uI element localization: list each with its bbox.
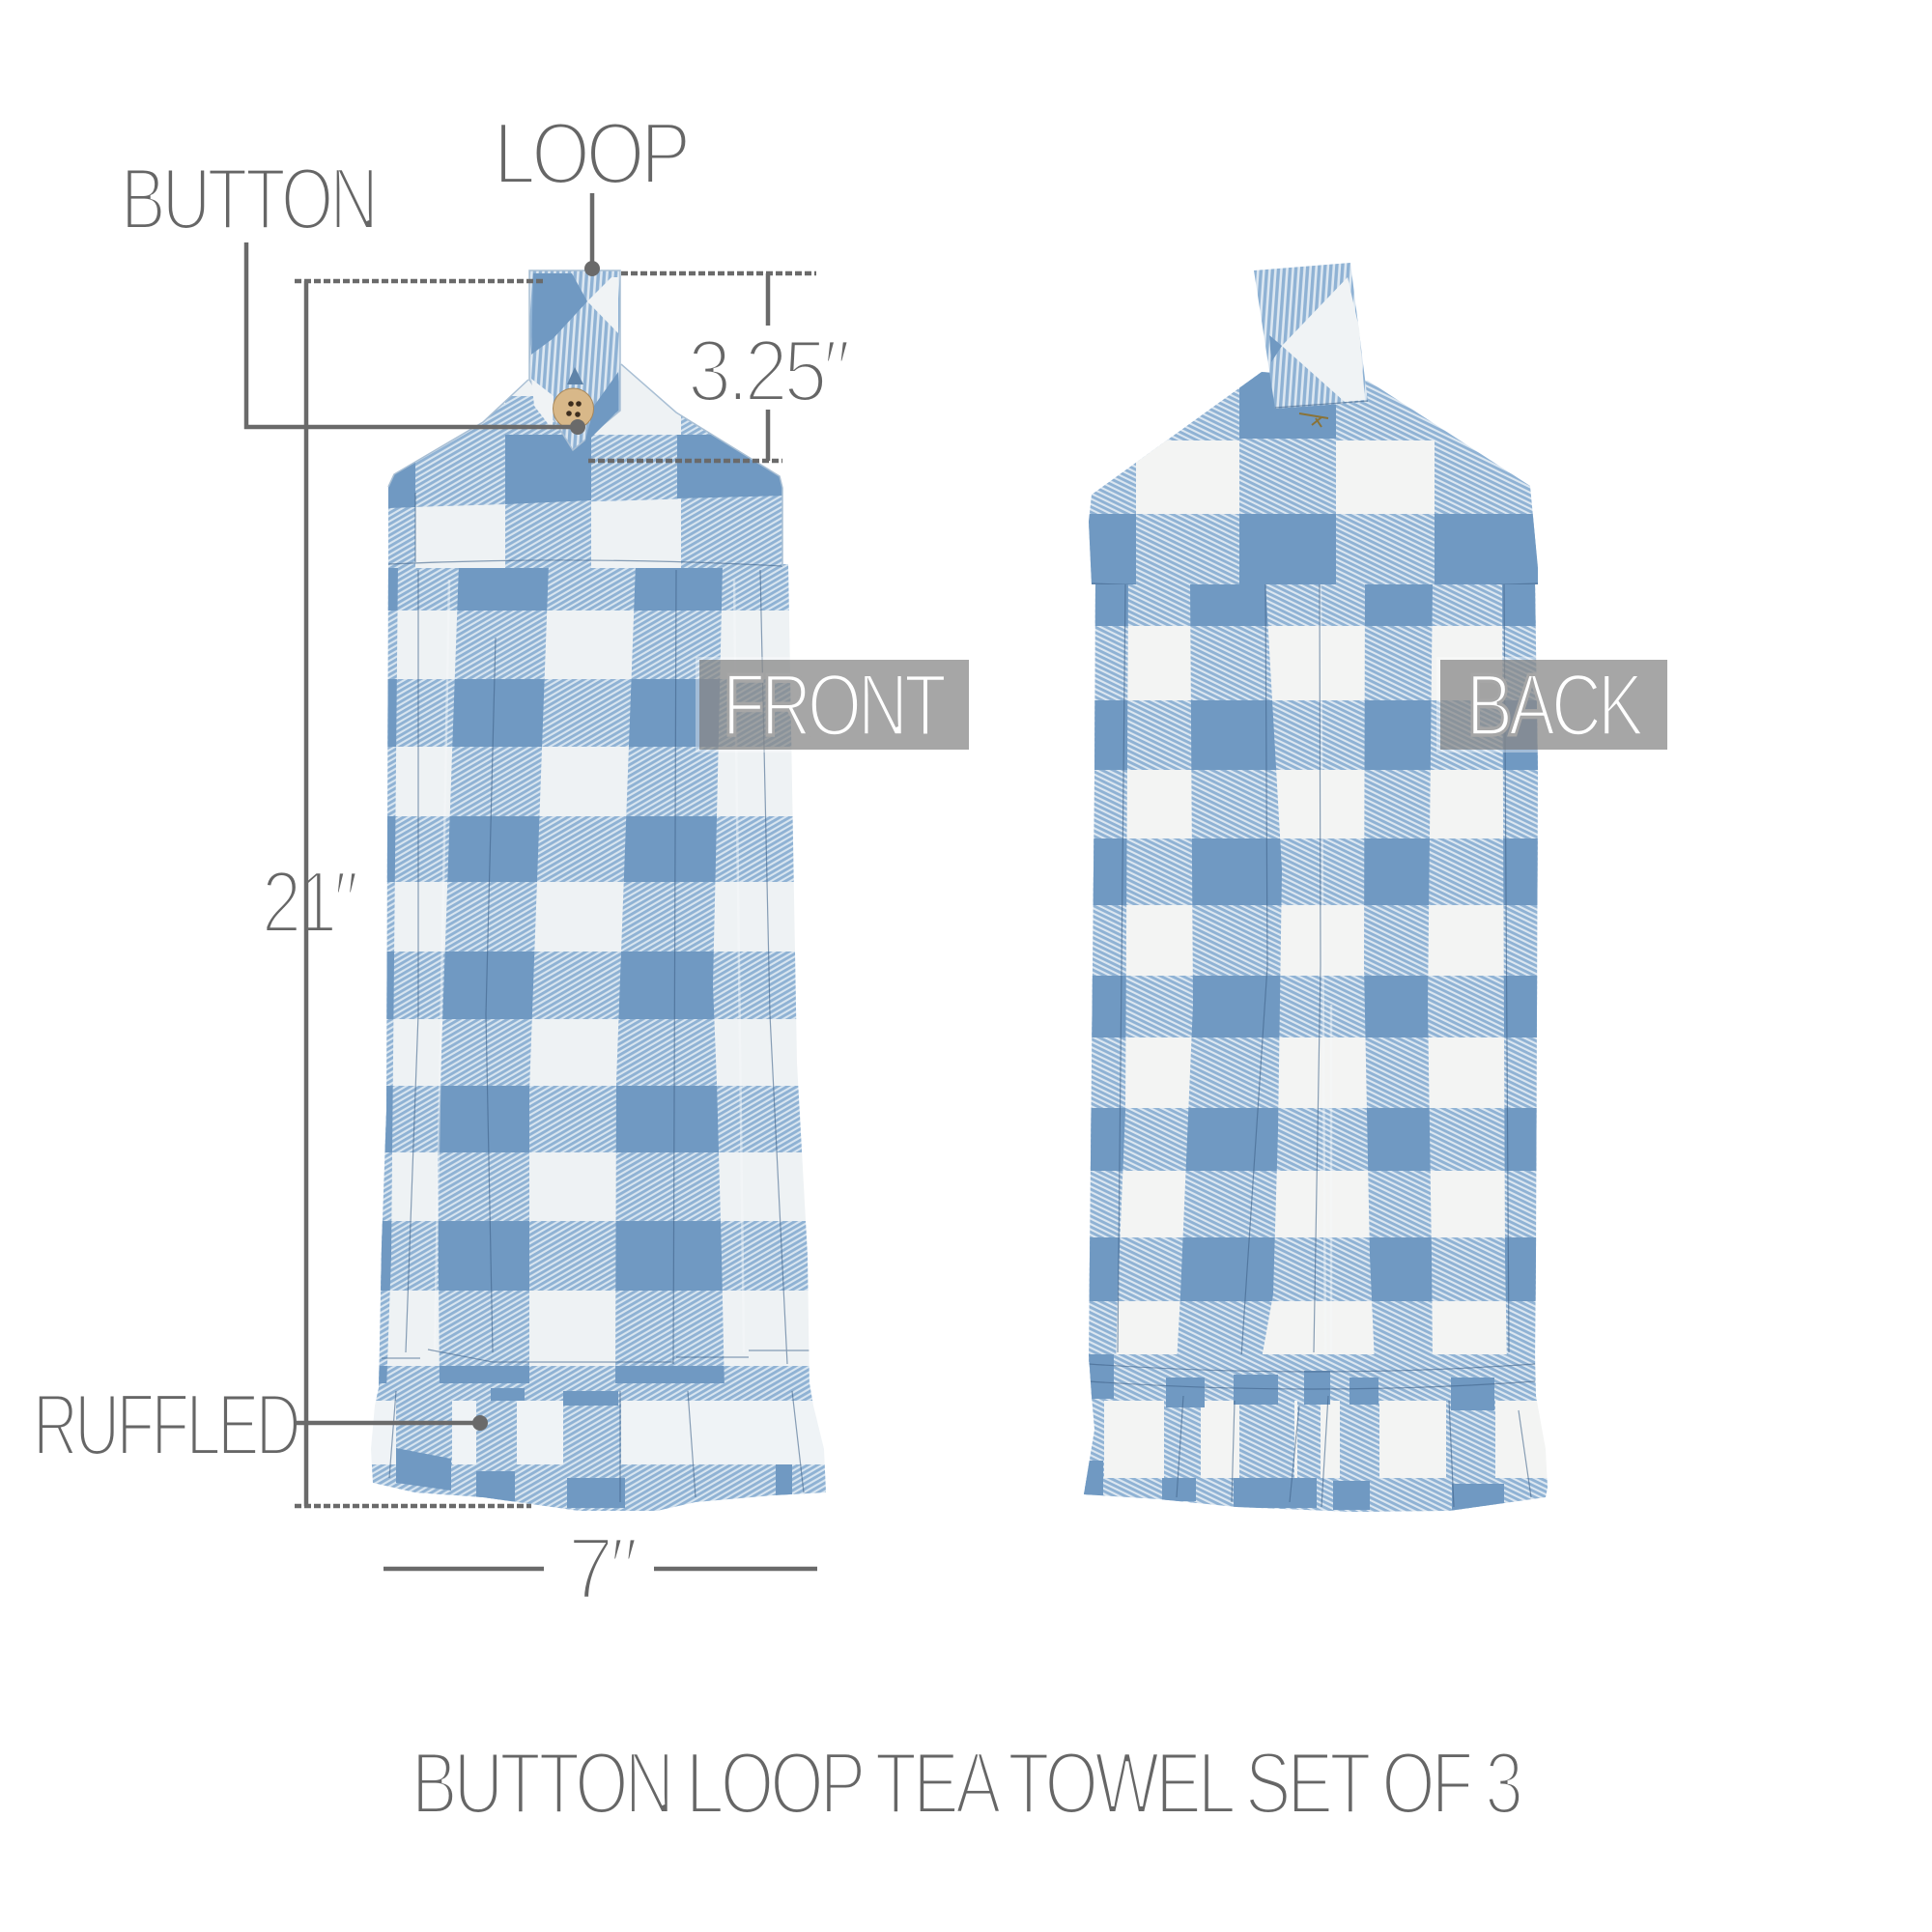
leader: button <box>246 242 585 435</box>
front loop with button <box>529 270 620 450</box>
front towel outline <box>388 364 782 566</box>
back towel body <box>1072 580 1555 1367</box>
dimension lines: 21 inch height <box>295 281 545 1506</box>
towel: back view <box>1072 263 1555 1521</box>
front ruffle <box>367 1381 831 1517</box>
label: BUTTON: BUTTON <box>121 151 375 248</box>
back ruffle <box>1084 1354 1548 1512</box>
badge: BACK: BACK <box>1466 657 1643 754</box>
badge: FRONT: FRONT <box>723 657 946 754</box>
dimension lines: 7 inch width <box>384 1567 817 1571</box>
leader: loop <box>584 193 600 276</box>
icon: thread knot <box>1299 413 1328 427</box>
label: LOOP: LOOP <box>494 105 687 203</box>
dimension: 3.25 inches: 3.25″ <box>688 323 849 420</box>
dimension: 7 inches: 7″ <box>568 1520 638 1618</box>
title: BUTTON LOOP TEA TOWEL SET OF 3 <box>412 1735 1520 1833</box>
front towel header panel <box>382 362 787 570</box>
label: RUFFLED: RUFFLED <box>33 1377 298 1474</box>
back loop <box>1254 263 1368 409</box>
dimension lines: 3.25 inch loop <box>588 273 816 461</box>
front towel body <box>367 560 821 1396</box>
back towel header panel <box>1082 367 1546 589</box>
icon: wooden button <box>553 388 593 429</box>
towel: front view <box>367 270 831 1517</box>
leader: ruffled <box>296 1415 488 1431</box>
dimension: 21 inches: 21″ <box>262 854 357 952</box>
